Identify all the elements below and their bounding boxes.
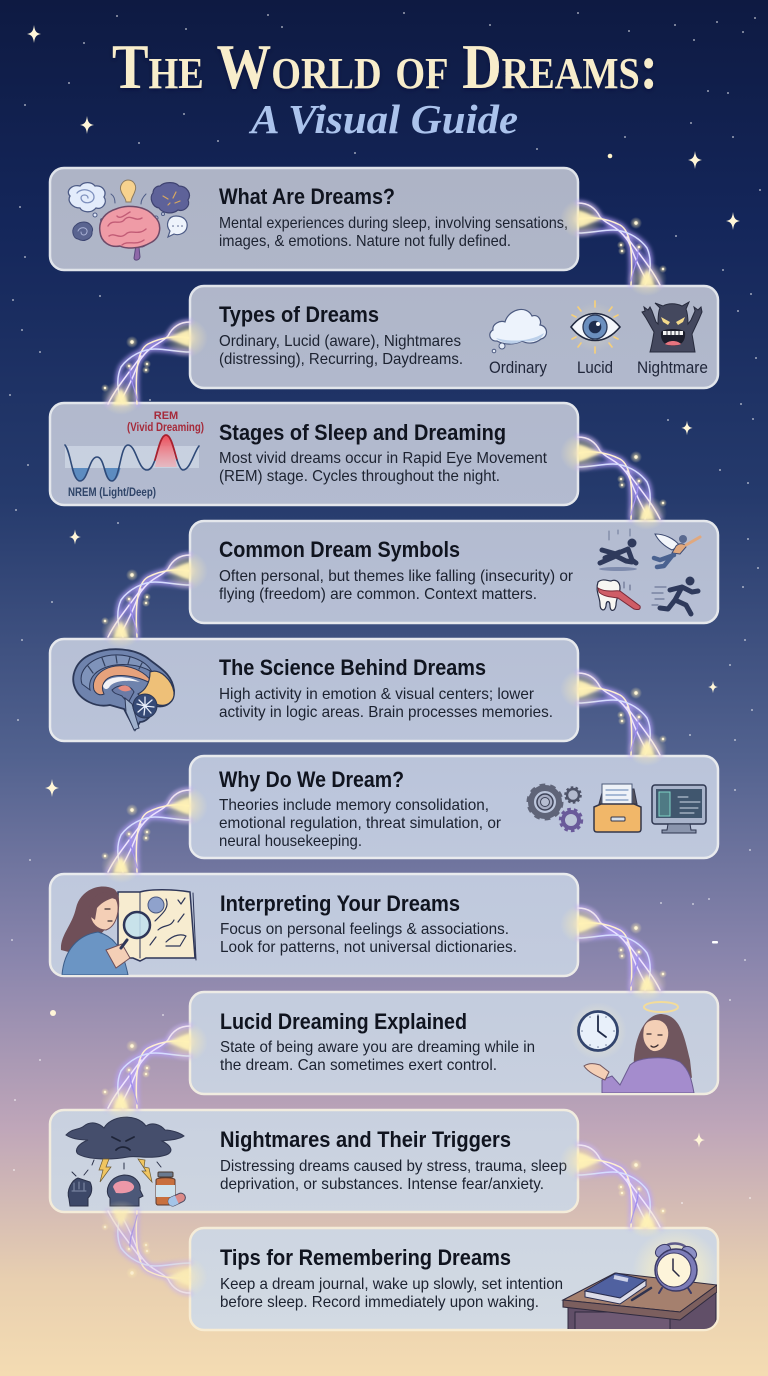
icon: gears (530, 787, 582, 830)
connector: lucid dreaming to nightmares (101, 1022, 208, 1119)
text block (219, 568, 574, 603)
connector: stages of sleep to dream symbols (560, 433, 667, 530)
text block: High activity in emotion & visual centers; lower (219, 686, 535, 703)
panel: common dream symbols (190, 521, 718, 623)
chart: sleep stages wave: NREM (Light/Deep) (68, 487, 156, 499)
panel: stages of sleep (50, 403, 578, 505)
text block (220, 1158, 567, 1193)
connector: interpreting dreams to lucid dreaming (560, 904, 667, 1001)
label: Nightmare (637, 359, 708, 377)
panel: lucid dreaming explained (190, 992, 718, 1094)
label: Ordinary (489, 359, 548, 377)
icon: storm cloud with triggers (66, 1117, 187, 1207)
panel: why do we dream (190, 756, 718, 858)
text block: activity in logic areas. Brain processes memories. (219, 704, 553, 721)
chart: sleep stages wave: (Vivid Dreaming) (127, 422, 204, 434)
text block: Theories include memory consolidation, (219, 797, 489, 814)
icon: lucid eye (570, 301, 620, 353)
icon: flying person (654, 534, 700, 567)
title: The World of Dreams: (112, 32, 658, 102)
text block: Look for patterns, not universal dictionaries. (220, 939, 517, 956)
panel: what are dreams (50, 168, 578, 270)
icon: computer monitor (652, 785, 706, 833)
text block (219, 215, 568, 250)
heading: The Science Behind Dreams (219, 655, 486, 680)
text block: Most vivid dreams occur in Rapid Eye Movement (219, 450, 548, 467)
heading: Lucid Dreaming Explained (220, 1009, 467, 1034)
text block: deprivation, or substances. Intense fear/anxiety. (220, 1176, 544, 1193)
illustration: person with halo (584, 1002, 694, 1093)
text block: Distressing dreams caused by stress, trauma, sleep (220, 1158, 567, 1175)
connector: nightmares panel to tips panel on the left (101, 1200, 208, 1297)
connector: types of dreams to stages of sleep (101, 318, 208, 415)
text block: neural housekeeping. (219, 833, 362, 850)
subtitle: A Visual Guide (248, 96, 518, 142)
label: Lucid (577, 359, 613, 377)
illustration: person with dream journal (61, 886, 196, 975)
heading: Nightmares and Their Triggers (220, 1127, 511, 1152)
text block (220, 1039, 535, 1074)
text block (220, 1276, 563, 1311)
heading: Stages of Sleep and Dreaming (219, 420, 506, 445)
text block: Mental experiences during sleep, involving sensations, (219, 215, 568, 232)
icon: glowing clock (569, 1002, 627, 1060)
connector: nightmares to tips (560, 1141, 667, 1238)
icon: falling person (599, 529, 637, 571)
text block: images, & emotions. Nature not fully defined. (219, 233, 511, 250)
icon: falling tooth (597, 580, 640, 610)
heading: What Are Dreams? (219, 184, 395, 209)
icon: brain cross-section (73, 649, 174, 730)
icon: brain with thoughts (68, 180, 189, 260)
panel: interpreting your dreams (50, 874, 578, 976)
text block: Often personal, but themes like falling (insecurity) or (219, 568, 574, 585)
icon: memory drawer (594, 784, 641, 832)
text block: Focus on personal feelings & associations. (220, 921, 509, 938)
text block: State of being aware you are dreaming while in (220, 1039, 535, 1056)
text block: emotional regulation, threat simulation, or (219, 815, 502, 832)
text block: Ordinary, Lucid (aware), Nightmares (219, 333, 461, 350)
text block (219, 450, 548, 485)
icon: nightmare monster (642, 302, 702, 352)
panel: types of dreams (190, 286, 718, 388)
heading: Interpreting Your Dreams (220, 891, 460, 916)
panel: tips for remembering dreams (190, 1228, 720, 1330)
text block (219, 797, 502, 850)
text block: flying (freedom) are common. Context matters. (219, 586, 537, 603)
text block: (distressing), Recurring, Daydreams. (219, 351, 463, 368)
connector: why we dream to interpreting dreams (101, 786, 208, 883)
text block: the dream. Can sometimes exert control. (220, 1057, 497, 1074)
text block: before sleep. Record immediately upon waking. (220, 1294, 539, 1311)
heading: Types of Dreams (219, 302, 379, 327)
illustration: nightstand with journal and alarm clock (563, 1228, 720, 1330)
heading: Common Dream Symbols (219, 537, 460, 562)
text block: (REM) stage. Cycles throughout the night. (219, 468, 500, 485)
text block (220, 921, 517, 956)
panel: science behind dreams (50, 639, 578, 741)
heading: Why Do We Dream? (219, 767, 404, 792)
chart: sleep stages wave (65, 410, 204, 499)
connector: what are dreams to types of dreams (560, 199, 667, 296)
icon: running person (652, 576, 698, 614)
icon: ordinary cloud (490, 309, 547, 353)
text block (219, 333, 463, 368)
connector: science of dreams to why we dream (560, 669, 667, 766)
panel: nightmares and triggers (50, 1110, 578, 1212)
text block: Keep a dream journal, wake up slowly, set intention (220, 1276, 563, 1293)
heading: Tips for Remembering Dreams (220, 1245, 511, 1270)
text block (219, 686, 553, 721)
chart: sleep stages wave: REM (154, 410, 178, 422)
connector: dream symbols to science of dreams (101, 551, 208, 648)
